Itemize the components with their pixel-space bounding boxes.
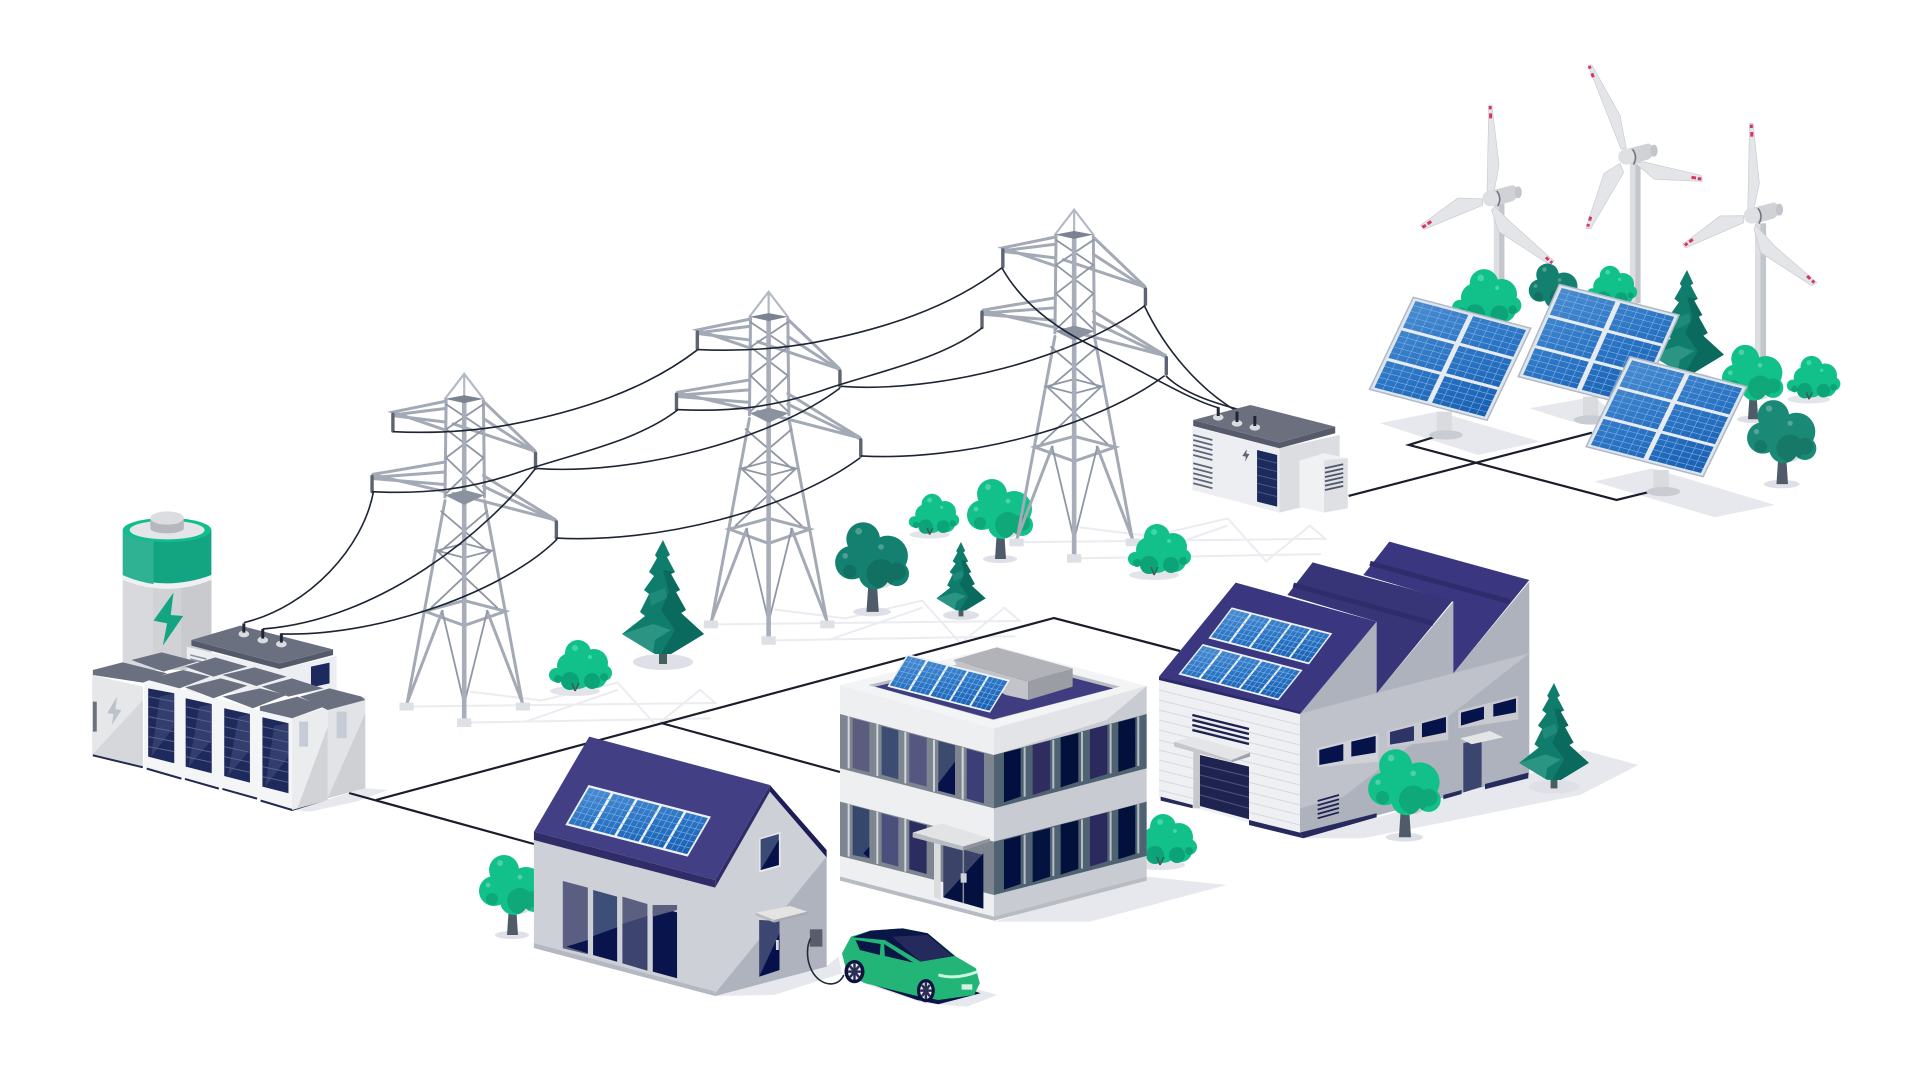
underground cables between battery and buildings — [349, 618, 1180, 844]
pine: small — [936, 542, 986, 620]
tree: dark in front of panels — [1747, 400, 1816, 488]
bush: behind second panel — [1587, 266, 1637, 311]
bush: by third pylon — [1128, 524, 1191, 580]
battery storage system — [92, 468, 557, 810]
factory roof solar panels: upper — [1208, 607, 1332, 664]
car roof and windows — [853, 928, 954, 963]
tower ground shadows — [401, 518, 1326, 726]
solar transformer station — [1192, 405, 1348, 513]
bush: middle — [909, 494, 959, 539]
tree: beside house — [479, 855, 545, 939]
cabinet: left with bolt — [92, 675, 143, 767]
bush: near first pylon — [549, 640, 612, 696]
factory vents — [1192, 715, 1249, 744]
transformer roof — [1193, 405, 1335, 448]
tree: light right of panels — [1722, 345, 1783, 423]
office window band: upper right — [994, 714, 1147, 808]
house gable wall — [715, 792, 827, 996]
wind turbines — [1420, 65, 1817, 360]
house roof — [534, 737, 827, 888]
solar farm cables — [1349, 433, 1654, 500]
EV wall charger and cable — [807, 929, 844, 984]
office base strips — [840, 877, 1147, 921]
transformer side face — [1279, 435, 1340, 513]
office window band: lower left — [840, 802, 994, 895]
big battery icon — [123, 511, 211, 670]
panel mount: second — [1574, 397, 1608, 425]
tree: dark round — [835, 522, 909, 616]
office rooftop unit — [953, 647, 1073, 700]
pine: factory — [1519, 683, 1589, 794]
car wheels — [844, 960, 935, 1002]
pylon: second — [676, 292, 861, 645]
factory side wall — [1300, 582, 1529, 836]
house upper window — [759, 832, 781, 873]
factory building — [1159, 542, 1529, 838]
factory base strips — [1161, 773, 1528, 838]
transformer vents — [1193, 435, 1212, 488]
office window band: lower right — [994, 802, 1147, 895]
bush: behind office — [1134, 814, 1197, 870]
office left wall — [840, 685, 994, 921]
cabinets with vented doors — [144, 679, 324, 810]
ground shadows — [292, 397, 1775, 1007]
tree: dark behind panels — [1529, 264, 1578, 326]
house — [534, 737, 844, 996]
power lines: pylon to solar transformer — [1002, 268, 1256, 414]
car windscreen highlight — [892, 935, 953, 962]
office roof — [840, 647, 1147, 728]
office window band: upper left — [840, 714, 994, 808]
house front windows — [563, 881, 677, 978]
office right wall — [994, 686, 1147, 921]
car headlight and plate — [938, 972, 978, 990]
pine: solar farm — [1650, 270, 1724, 387]
power lines to battery transformer — [244, 468, 557, 634]
solar panel: third — [1586, 357, 1747, 477]
car body — [842, 928, 980, 1000]
solar panel: first — [1370, 297, 1531, 420]
factory side door — [1460, 731, 1503, 793]
trees between the pylons — [549, 479, 1033, 696]
factory garage — [1174, 737, 1250, 819]
solar farm panels — [1370, 284, 1747, 496]
panel mount: first — [1429, 412, 1463, 440]
house rooftop solar panels — [565, 785, 711, 857]
turbine: centre — [1586, 65, 1702, 303]
house front wall — [534, 837, 715, 996]
office entrance — [913, 823, 990, 909]
trees behind solar panels — [1452, 264, 1840, 423]
bush: behind first panel — [1452, 269, 1521, 331]
factory windows — [1317, 696, 1518, 767]
factory small vent — [1318, 795, 1339, 818]
power lines between pylons — [372, 268, 1165, 539]
transformer front face — [1192, 427, 1279, 513]
cabinet tops — [93, 652, 365, 718]
panel mount: third — [1646, 470, 1680, 496]
tree: front of factory — [1368, 749, 1441, 842]
transformer side unit — [1299, 453, 1348, 513]
factory gable wall — [1159, 680, 1300, 836]
solar panel: second — [1518, 284, 1679, 407]
car shadow — [849, 977, 981, 1004]
tree: light round — [967, 479, 1033, 563]
pylon: third — [982, 210, 1166, 563]
pine: large — [622, 540, 704, 670]
transformer door — [1257, 450, 1277, 507]
turbine: right — [1683, 123, 1817, 360]
office rooftop solar panels — [887, 654, 1010, 713]
cabinet: front right side — [292, 707, 328, 810]
office building — [840, 647, 1147, 921]
electric car — [842, 928, 981, 1004]
house door and canopy — [756, 906, 807, 977]
factory sawtooth roofs — [1159, 542, 1529, 714]
pylon: first — [372, 374, 556, 727]
cabinet: far right side — [328, 697, 365, 798]
turbine: left — [1420, 105, 1554, 290]
transformer bushings — [1213, 407, 1260, 431]
factory roof solar panels: lower — [1178, 644, 1303, 700]
transformer bolt icon — [1242, 449, 1249, 462]
transformer behind cabinets — [187, 623, 337, 693]
bush: far right — [1787, 356, 1840, 403]
